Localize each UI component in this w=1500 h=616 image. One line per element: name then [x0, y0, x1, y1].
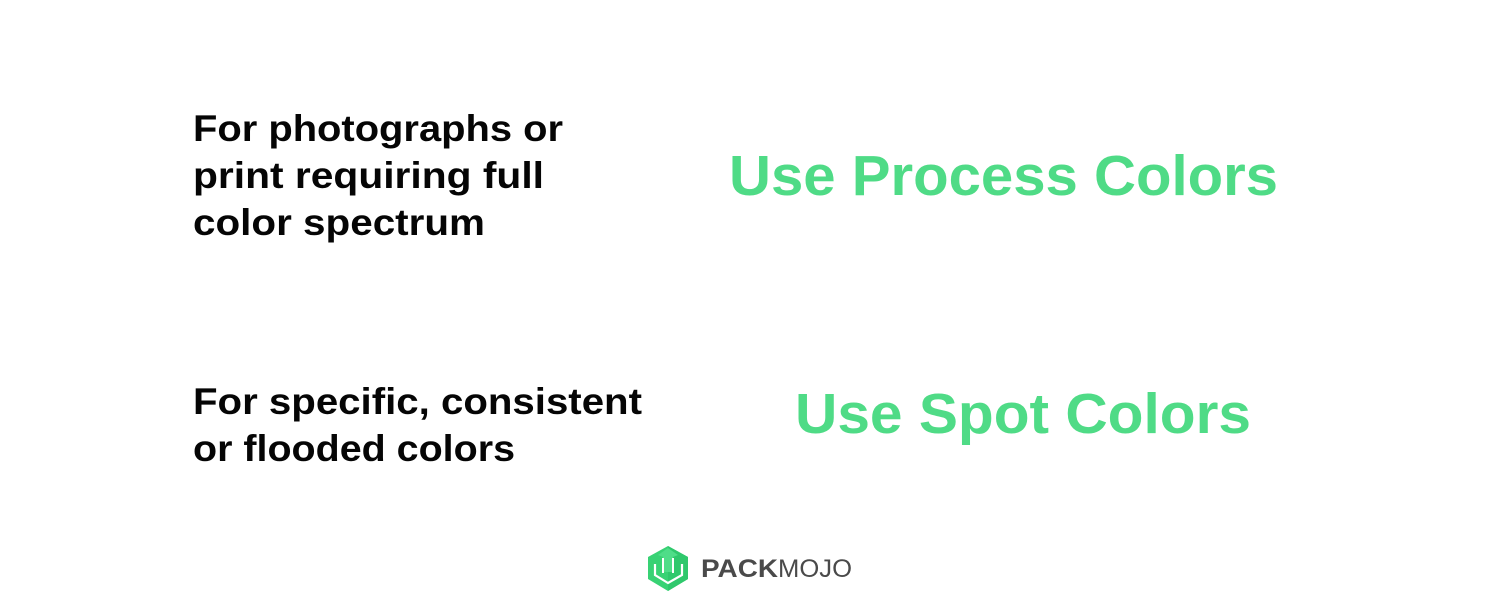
text block: spot color condition [193, 381, 642, 469]
text block: spot color condition: or flooded colors [193, 428, 515, 469]
logo: PackMojo [648, 546, 852, 591]
text block: photographs condition: For photographs or [193, 108, 563, 149]
heading: Use Spot Colors: Use Spot Colors [795, 382, 1251, 446]
logo wordmark [701, 555, 852, 583]
heading: Use Process Colors: Use Process Colors [729, 144, 1278, 208]
logo wordmark: PACK [701, 555, 778, 583]
icon: green hexagon box [648, 546, 688, 591]
text block: photographs condition: color spectrum [193, 202, 485, 243]
logo wordmark: MOJO [778, 555, 852, 583]
text block: photographs condition [193, 108, 563, 243]
text block: photographs condition: print requiring full [193, 155, 544, 196]
text block: spot color condition: For specific, consistent [193, 381, 642, 422]
